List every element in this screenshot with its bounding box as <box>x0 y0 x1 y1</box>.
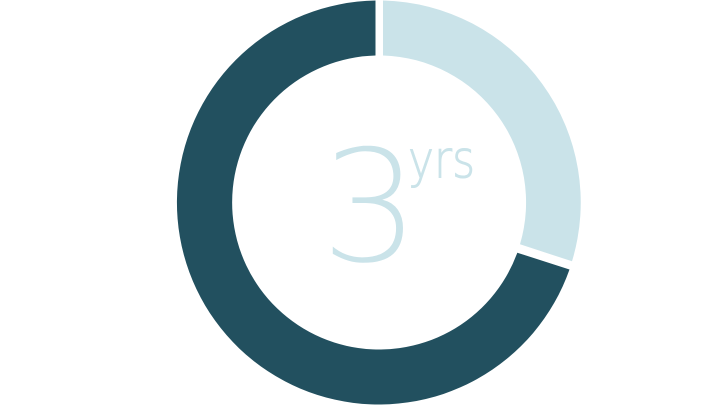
unit yrs: yrs <box>408 130 475 190</box>
center label: 3 yrs <box>320 116 475 298</box>
dark segment: remainder <box>177 1 570 405</box>
light segment: 3 years <box>383 1 581 261</box>
large numeral 3: 3 <box>320 116 420 298</box>
